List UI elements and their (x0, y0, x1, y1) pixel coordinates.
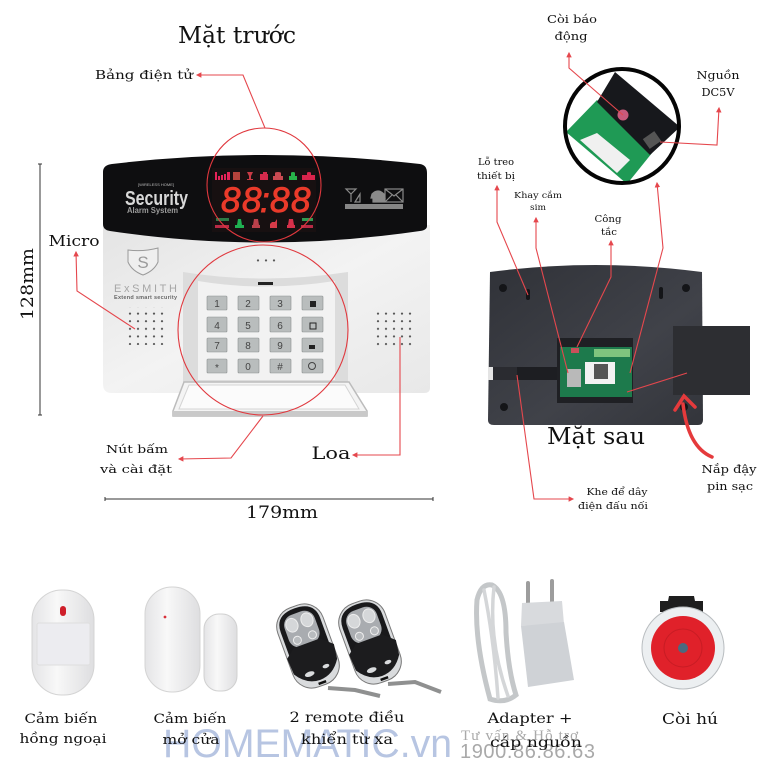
caption: adapter (486, 711, 582, 751)
device body (103, 225, 430, 393)
keypad keys: 9 (277, 341, 283, 352)
product: adapter and cable (477, 581, 574, 701)
caption: motion sensor: hồng ngoại (20, 731, 106, 747)
brand name (114, 283, 178, 301)
speaker dots: top (253, 255, 277, 266)
label: buzzer: Còi báo (547, 13, 597, 26)
brand shield: S (137, 253, 149, 272)
buzzer (618, 110, 628, 120)
remote two (333, 594, 408, 690)
arrow: hanging hole (497, 186, 528, 295)
caption: motion sensor (20, 711, 106, 747)
keypad keys: 7 (214, 341, 220, 352)
wire slot (488, 367, 558, 380)
security logo: [WIRELESS HOME] (138, 182, 174, 187)
signal bars (215, 172, 230, 180)
label: switch: Công (594, 214, 622, 225)
dimension: height: 128mm (18, 248, 37, 320)
pcb (566, 100, 652, 184)
keypad keys: 1 (214, 299, 220, 310)
cable (477, 585, 516, 701)
label: sim tray: Khay cắm (514, 190, 562, 200)
heading: front side: Mặt trước (178, 23, 296, 49)
label: hanging hole (477, 156, 515, 182)
back device (488, 265, 750, 425)
label: keypad: Nút bấm (106, 442, 168, 456)
dimension: height (18, 164, 42, 415)
label: electronic panel: Bảng điện tử (95, 67, 194, 82)
label: buzzer: động (554, 30, 588, 43)
caption: door sensor: mở cửa (162, 733, 220, 748)
caption: door sensor (154, 711, 227, 748)
product: door sensor (145, 587, 237, 692)
keypad keys: * (215, 363, 219, 374)
keypad keys: 2 (245, 299, 251, 310)
black display band (103, 155, 427, 242)
arrow: switch (577, 241, 611, 347)
keypad keys: 0 (245, 362, 251, 373)
line: battery (627, 373, 687, 392)
dimension: width (105, 497, 433, 522)
label: sim tray (514, 190, 562, 212)
brand name: Extend smart security (114, 295, 178, 301)
housing (597, 72, 680, 155)
caption: remotes: 2 remote điều (290, 709, 404, 726)
dimension: width: 179mm (246, 503, 318, 522)
clock digits: 88:88 (221, 181, 311, 220)
arrow: power (660, 108, 719, 145)
label: speaker: Loa (312, 444, 350, 464)
arrow: electronic panel (197, 75, 265, 128)
keypad keys (207, 296, 323, 374)
caption: siren: Còi hú (662, 710, 718, 728)
LED display (212, 168, 316, 232)
label: micro: Micro (48, 234, 100, 250)
label: power (696, 69, 740, 99)
label: wire slot: Khe để dây (586, 486, 648, 498)
caption: remotes (290, 709, 404, 748)
speaker dots: right (374, 308, 414, 346)
keypad keys: 6 (277, 321, 283, 332)
arrow: to inset (630, 183, 663, 373)
label: wire slot (578, 486, 648, 512)
label: switch: tắc (601, 226, 617, 238)
security logo (125, 182, 189, 215)
label: buzzer (547, 13, 597, 43)
back casing (488, 265, 703, 425)
sticker (580, 133, 630, 173)
arrow: micro (76, 252, 135, 329)
caption: adapter: Adapter + (486, 711, 572, 727)
arrow: buzzer (569, 53, 623, 115)
keypad keys: 4 (214, 321, 220, 332)
remote one (271, 598, 346, 694)
product: siren (642, 596, 724, 689)
circuit board (557, 338, 633, 403)
heading: back side: Mặt sau (547, 424, 645, 450)
label: battery cover: Nắp đậy (702, 463, 757, 476)
caption: adapter: cáp nguồn (490, 734, 582, 751)
brand shield (128, 248, 158, 275)
label: battery cover: pin sạc (707, 480, 753, 493)
label: power: Nguồn (696, 69, 740, 82)
label: keypad: và cài đặt (99, 462, 172, 476)
label: hanging hole: Lỗ treo (478, 156, 514, 168)
caption: motion sensor: Cảm biến (24, 711, 98, 727)
watermark (163, 722, 595, 760)
highlight circle: keypad (178, 245, 348, 415)
caption: door sensor: Cảm biến (154, 711, 227, 727)
circle ring (565, 69, 679, 183)
watermark: Tư vấn & Hỗ trợ (461, 728, 579, 744)
keypad keys: 5 (245, 321, 251, 332)
caption: remotes: khiển từ xa (301, 730, 393, 748)
charger plug (521, 601, 564, 626)
product: remotes (271, 594, 441, 696)
label: battery cover (702, 463, 757, 493)
charger body (521, 622, 574, 687)
security logo: Security (125, 188, 189, 210)
arrow: battery cover (675, 396, 712, 457)
label: wire slot: điện đấu nối (578, 501, 648, 512)
security logo: Alarm System (127, 206, 178, 215)
keypad keys: 3 (277, 299, 283, 310)
product: motion sensor (32, 590, 94, 695)
top status icons (233, 172, 315, 180)
screw holes (499, 284, 690, 411)
arrow: wire slot (517, 375, 573, 499)
keypad recess (183, 272, 348, 383)
label: hanging hole: thiết bị (477, 171, 515, 182)
open flap (173, 382, 367, 416)
keypad keys: # (277, 362, 283, 373)
key chains (328, 682, 441, 696)
arrow: sim tray (536, 218, 568, 373)
front device (103, 155, 430, 416)
battery cover (673, 326, 750, 395)
arrow: speaker (353, 337, 400, 455)
keypad keys: 8 (245, 341, 251, 352)
label: power: DC5V (702, 86, 736, 99)
icons: signal, phone, mail (345, 189, 403, 209)
inset: circle detail (563, 67, 681, 185)
label: sim tray: sim (530, 202, 546, 212)
usb port (643, 131, 661, 149)
brand name: ExSMITH (114, 283, 177, 295)
speaker dots: left (124, 307, 164, 345)
label: switch (594, 214, 622, 238)
highlight circle: display (207, 128, 321, 242)
label: keypad (99, 442, 172, 476)
pins (528, 581, 552, 603)
arrow: keypad (179, 416, 263, 459)
bottom status icons (215, 218, 313, 228)
